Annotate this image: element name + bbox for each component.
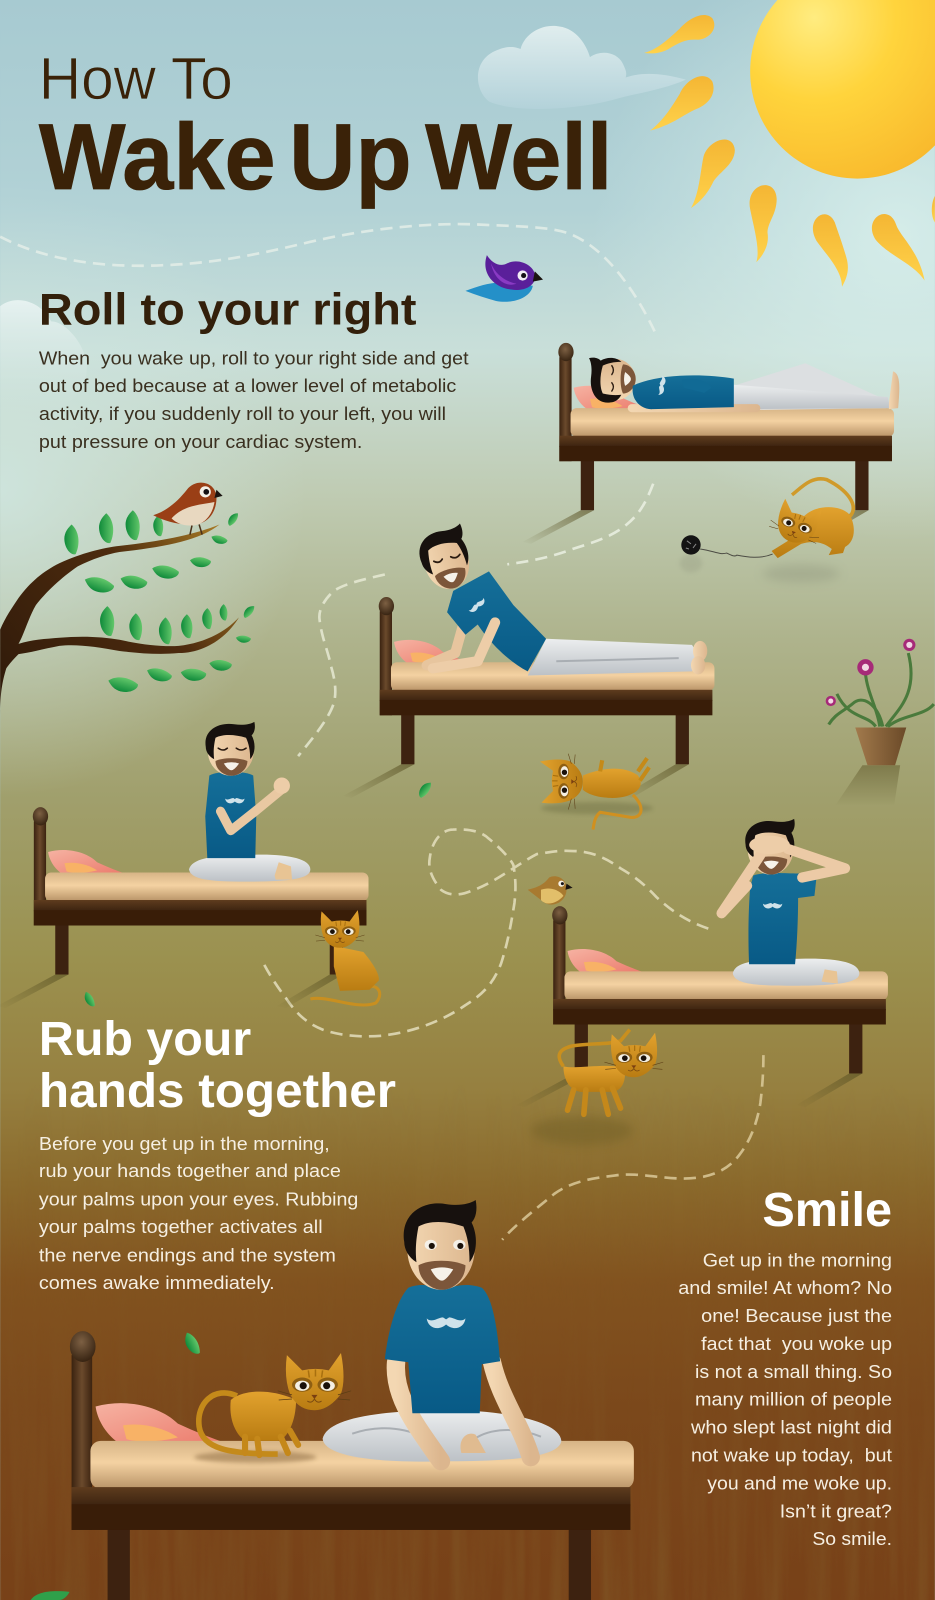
bed	[10, 1331, 634, 1600]
title: Wake Up Well	[39, 104, 612, 209]
falling leaf 4	[31, 1591, 70, 1600]
cloud: left	[0, 300, 87, 413]
bed	[0, 807, 369, 1008]
body: smile: who slept last night did	[690, 1417, 892, 1438]
seated person	[323, 1200, 561, 1462]
body: roll to your right: out of bed because at a lower level of metabolic	[39, 375, 456, 396]
bed 2 with leaning person	[343, 523, 714, 798]
pot shadow	[835, 765, 900, 806]
body: rub your hands together	[39, 1133, 358, 1293]
cloud: top	[478, 26, 686, 109]
bed 4 with person covering eyes	[516, 819, 888, 1107]
body: smile: Get up in the morning	[703, 1249, 892, 1270]
yarn ball and string	[680, 535, 773, 572]
person rubbing eyes	[722, 819, 859, 986]
bed	[343, 597, 714, 798]
body: smile	[678, 1249, 893, 1549]
large cat on bed	[194, 1353, 351, 1463]
body: rub your hands together: rub your hands together and place	[39, 1160, 341, 1181]
purple bird	[465, 255, 543, 302]
dashed path 5	[502, 1055, 763, 1240]
tree with leaves	[0, 510, 257, 714]
body: smile: So smile.	[812, 1528, 892, 1549]
person sitting rubbing hands	[189, 722, 310, 882]
body: rub your hands together: the nerve endings and the system	[39, 1245, 336, 1266]
body: roll to your right: activity, if you suddenly roll to your left, you will	[39, 403, 446, 424]
body: rub your hands together: your palms upon your eyes. Rubbing	[39, 1189, 358, 1210]
brown bird on branch	[153, 483, 223, 535]
stems	[829, 653, 934, 727]
body: smile: you and me woke up.	[707, 1472, 892, 1493]
heading: rub your hands together: hands together	[39, 1065, 396, 1118]
leaves	[64, 510, 257, 695]
body: smile: not wake up today, but	[691, 1445, 893, 1466]
falling leaf 2	[82, 990, 96, 1008]
bed	[516, 906, 888, 1107]
body: smile: many million of people	[695, 1389, 892, 1410]
body: smile: is not a small thing. So	[695, 1361, 892, 1382]
bed 5 large with smiling person and cat	[10, 1200, 634, 1600]
walking cat	[531, 1030, 663, 1145]
cat on its back	[540, 754, 653, 830]
body: rub your hands together: your palms together activates all	[39, 1216, 323, 1237]
dashed path 3	[298, 574, 385, 756]
body: roll to your right: When you wake up, roll to your right side and get	[39, 347, 469, 368]
bed	[523, 343, 894, 544]
pot	[855, 728, 906, 765]
branches	[0, 524, 239, 714]
bed 3 with sitting person	[0, 722, 369, 1008]
falling leaf 3	[182, 1330, 202, 1357]
body: smile: fact that you woke up	[701, 1333, 892, 1354]
body: rub your hands together: Before you get up in the morning,	[39, 1133, 330, 1154]
title: How To	[39, 45, 233, 112]
heading: rub your hands together	[39, 1013, 396, 1118]
flowers	[857, 659, 874, 676]
body: smile: Isn’t it great?	[780, 1500, 892, 1521]
bed 1 with lying person	[523, 343, 899, 544]
body: smile: and smile! At whom? No	[678, 1277, 892, 1298]
falling leaf 1	[416, 780, 434, 799]
body: smile: one! Because just the	[701, 1305, 892, 1326]
body: roll to your right: put pressure on your cardiac system.	[39, 431, 362, 452]
sun rays	[644, 15, 935, 287]
dashed path 4	[262, 829, 708, 1036]
small bird on bedpost	[528, 876, 573, 905]
person leaning	[414, 523, 707, 676]
dashed path 1	[0, 224, 655, 333]
sitting cat under bed	[310, 910, 380, 1005]
body: rub your hands together: comes awake immediately.	[39, 1272, 275, 1293]
flower pot	[826, 639, 934, 806]
eyes	[425, 1240, 465, 1250]
person lying	[589, 358, 899, 412]
heading: roll to your right: Roll to your right	[39, 283, 417, 334]
body: roll to your right	[39, 347, 469, 452]
dashed path 2	[507, 484, 653, 564]
wood grain floor	[64, 1503, 935, 1600]
title	[39, 45, 612, 209]
heading: rub your hands together: Rub your	[39, 1013, 251, 1066]
heading: smile: Smile	[762, 1184, 892, 1237]
sun	[750, 0, 935, 179]
cat playing with yarn	[762, 479, 854, 583]
